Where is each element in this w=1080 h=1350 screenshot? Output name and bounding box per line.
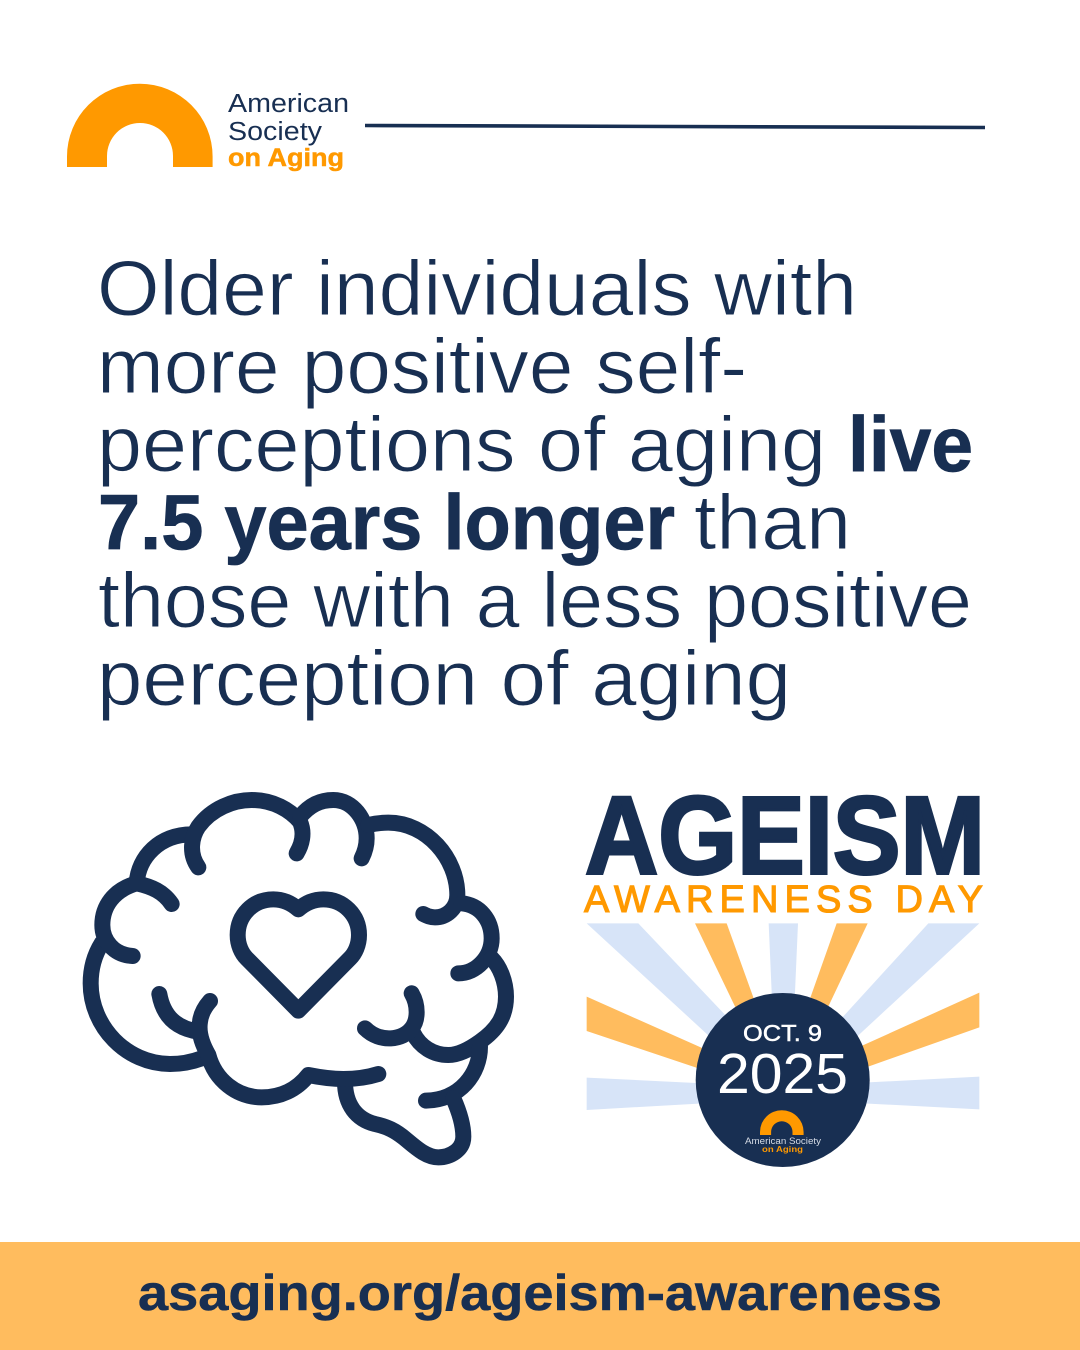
badge: Ageism Awareness Day: [584, 774, 985, 1167]
date circle: [696, 993, 870, 1167]
mini logo wordmark: on Aging: [762, 1144, 803, 1154]
sunburst rays: [587, 923, 979, 1110]
logo wordmark: on Aging: [228, 144, 344, 172]
logo wordmark: [228, 90, 349, 172]
main statement text: [97, 244, 973, 722]
logo wordmark: American: [228, 90, 349, 118]
main statement text: than: [694, 478, 851, 566]
logo icon: orange arch: [67, 84, 213, 167]
header: American Society on Aging logo: [67, 84, 349, 172]
main statement text: perceptions of aging: [97, 400, 826, 488]
main statement text: 7.5 years longer: [98, 478, 675, 566]
main statement text: perception of aging: [97, 634, 791, 722]
date: Oct. 9: OCT. 9: [743, 1020, 822, 1046]
logo wordmark: Society: [228, 118, 322, 146]
badge subtitle: Awareness Day: AWARENESS DAY: [584, 879, 983, 921]
main statement text: Older individuals with: [97, 244, 857, 332]
year: 2025: 2025: [717, 1042, 848, 1106]
mini logo wordmark: American Society: [745, 1136, 822, 1146]
icon: brain with heart: [91, 800, 506, 1157]
footer band: [0, 1242, 1080, 1350]
mini logo wordmark: [745, 1136, 822, 1154]
main statement text: those with a less positive: [98, 556, 972, 644]
main statement text: live: [848, 400, 973, 488]
mini logo arch: [760, 1110, 804, 1135]
icon: heart: [238, 899, 359, 1011]
badge title: AGEISM: AGEISM: [585, 774, 985, 898]
footer URL: asaging.org/ageism-awareness: [138, 1265, 942, 1321]
main statement text: more positive self-: [97, 322, 747, 410]
